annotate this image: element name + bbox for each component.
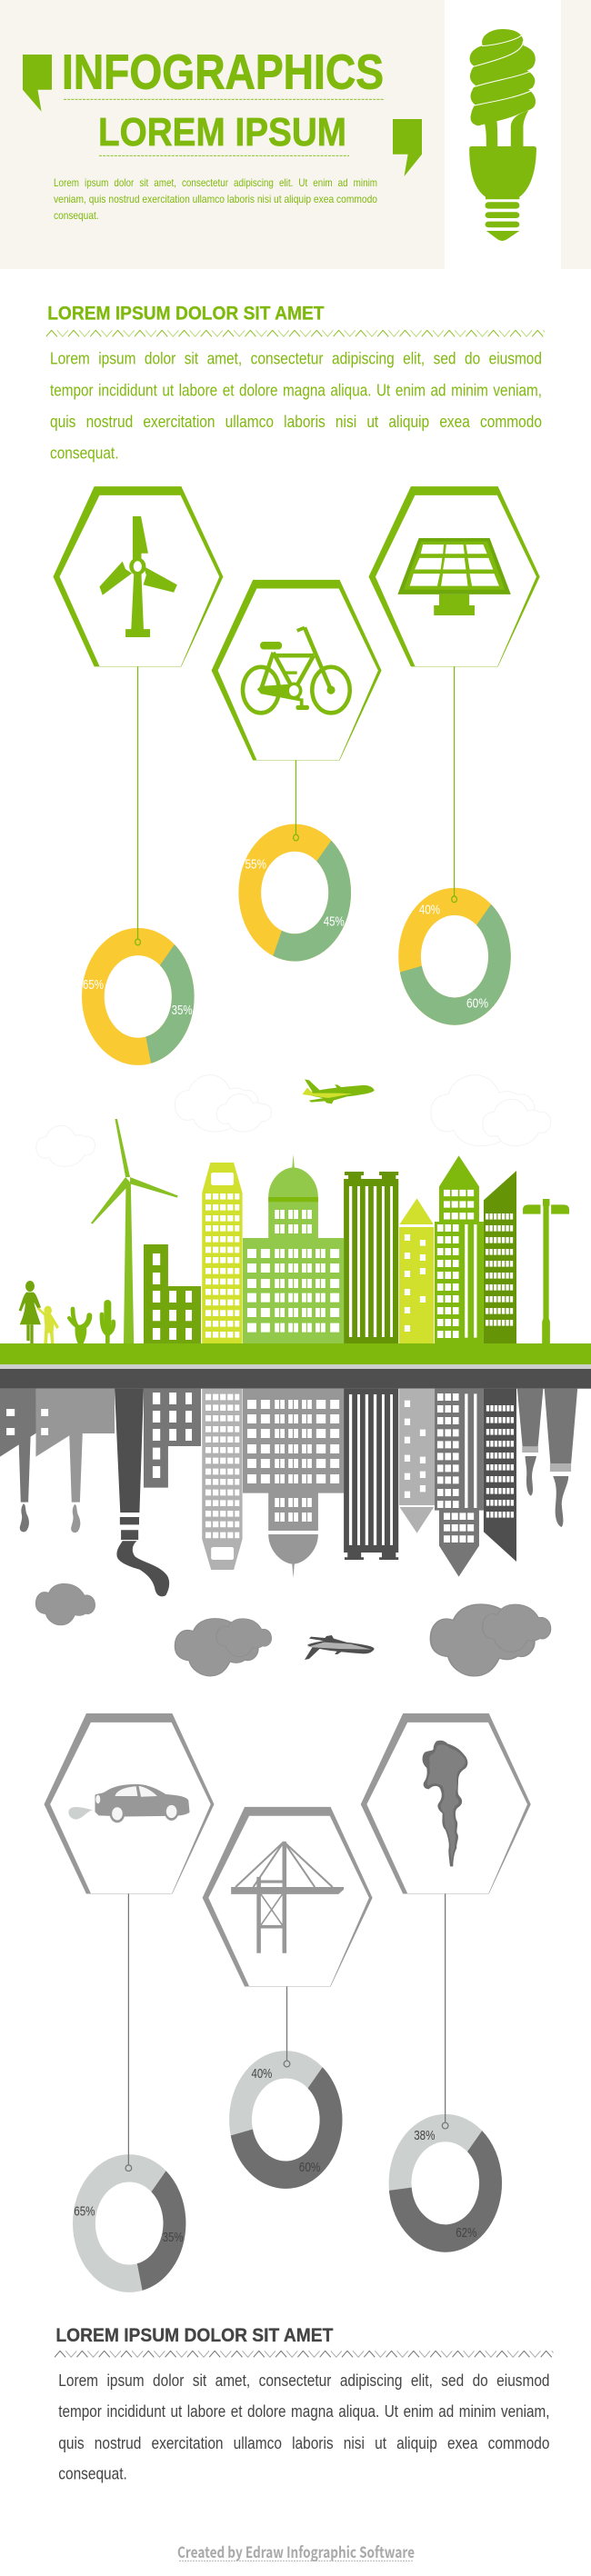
footer credit: Created by Edraw Infographic Software (177, 2540, 415, 2562)
building: yellow house (399, 1198, 434, 1343)
donut chart: 40/60 (391, 879, 518, 1033)
donut chart: 40/60: 60% (466, 995, 488, 1011)
icon: left quote mark (23, 55, 52, 112)
panel: grey inverted city (0, 1389, 577, 1676)
panel: grey hexagons and donuts (45, 1713, 531, 2301)
hexagon: smoke (361, 1713, 531, 1894)
clouds outline (36, 1075, 551, 1166)
donut chart: 38/62 grey: 38% (414, 2128, 435, 2143)
connectors and grey hexagon frames (45, 1713, 531, 2172)
connectors and hexagon frames (53, 486, 540, 945)
panel: ground strip (0, 1343, 591, 1389)
building: dark grey tower (344, 1389, 398, 1560)
icon: green airplane (303, 1079, 375, 1103)
header background (0, 0, 591, 269)
building: dark slanted tower (484, 1389, 516, 1562)
panel: header banner (0, 0, 591, 269)
connector dots (125, 2061, 448, 2172)
title: INFOGRAPHICS: INFOGRAPHICS (62, 45, 384, 100)
hexagon: solar (368, 486, 540, 666)
panel: green city scene (19, 1075, 569, 1343)
donut chart: 55/45: 55% (245, 857, 266, 873)
right chimneys with smoke (517, 1389, 577, 1527)
donut chart: 40/60 grey: 40% (251, 2066, 272, 2082)
hexagon: bicycle (212, 580, 382, 761)
connector lines (138, 666, 455, 939)
cacti (69, 1303, 114, 1343)
header text block: consequat. (54, 209, 99, 222)
donut chart: 65/35 grey: 65% (74, 2203, 95, 2219)
icon: smoke plume (423, 1741, 467, 1866)
icon: light bulb (469, 29, 536, 241)
child (37, 1306, 59, 1343)
icon: grey airplane (305, 1635, 375, 1660)
street lamp (523, 1199, 569, 1343)
building: left dark block (144, 1244, 201, 1343)
header text block (54, 176, 377, 222)
donut chart: 65/35 (75, 919, 202, 1074)
donut chart: 40/60: 40% (419, 903, 440, 918)
building: dark slanted tower (484, 1171, 516, 1343)
heading: LOREM IPSUM DOLOR SIT AMET (55, 2325, 334, 2346)
header text block: Lorem ipsum dolor sit amet, consectetur adipiscing elit. Ut enim ad minim (54, 176, 377, 189)
donut chart: 65/35 grey: 35% (163, 2230, 184, 2245)
building: grey spire tower (435, 1389, 484, 1577)
grey clouds (35, 1583, 551, 1676)
building: yellow tower (202, 1163, 243, 1343)
donut chart: 38/62 grey (382, 2105, 509, 2261)
panel: grey text block (55, 2325, 554, 2482)
icon: wind turbine (99, 516, 177, 637)
building: grey block (144, 1389, 201, 1488)
paragraph: consequat. (50, 444, 118, 463)
heading: LOREM IPSUM DOLOR SIT AMET (47, 304, 325, 324)
panel: green hexagons and donuts (53, 486, 540, 1074)
donut chart: 38/62 grey: 62% (456, 2225, 476, 2241)
subtitle: LOREM IPSUM: LOREM IPSUM (98, 110, 346, 155)
icon: bicycle (243, 627, 350, 713)
wind turbine (91, 1119, 178, 1343)
paragraph (58, 2371, 550, 2482)
connector dots (135, 834, 456, 945)
donut chart: 55/45 (231, 815, 358, 970)
paragraph (50, 350, 542, 463)
woman (19, 1281, 41, 1343)
donut chart: 65/35: 65% (83, 977, 104, 993)
hexagon: crane (203, 1807, 373, 1987)
donut chart: 40/60 grey: 60% (299, 2160, 320, 2175)
icon: car with exhaust (68, 1784, 190, 1822)
connector lines (128, 1894, 446, 2165)
donut chart: 65/35 grey (65, 2145, 193, 2301)
donut chart: 65/35: 35% (172, 1003, 193, 1018)
hexagon: wind (53, 486, 223, 666)
icon: right quote mark (393, 119, 422, 176)
header text block: veniam, quis nostrud exercitation ullamco laboris nisi ut aliquip exea commodo (54, 193, 377, 205)
building: grey house (399, 1389, 435, 1533)
panel: green intro text (46, 304, 545, 463)
building: dark striped tower (344, 1172, 398, 1343)
donut chart: 40/60 grey (222, 2042, 349, 2198)
factories left (0, 1389, 115, 1533)
icon: port crane (231, 1842, 344, 1953)
hexagon: car (45, 1713, 214, 1894)
icon: solar panel (397, 538, 511, 615)
paragraph: consequat. (58, 2464, 127, 2482)
building: light grey tower (202, 1389, 243, 1570)
building: domed hall (243, 1154, 344, 1343)
donut chart: 55/45: 45% (324, 914, 345, 930)
big chimney with smoke (115, 1389, 169, 1596)
building: green spire tower (435, 1155, 484, 1343)
building: grey domed hall (243, 1389, 344, 1578)
